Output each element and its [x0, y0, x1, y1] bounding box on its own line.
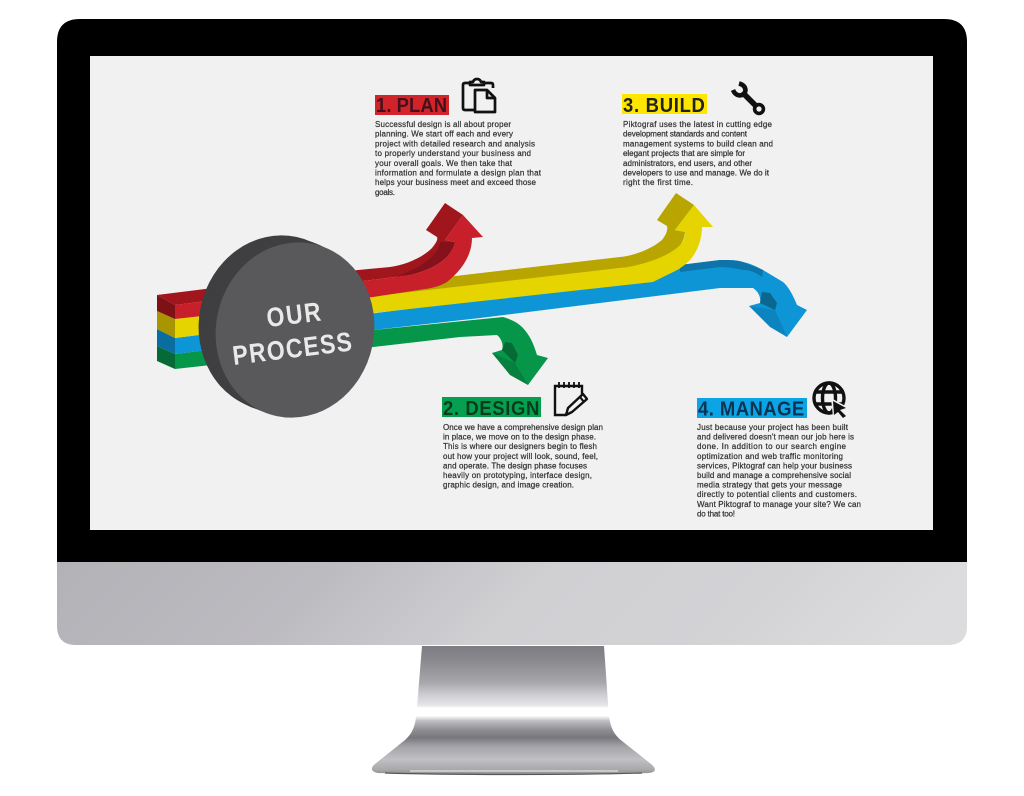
design text: and operate. The design phase focuses	[443, 461, 587, 470]
plan text: project with detailed research and analysis	[375, 139, 535, 148]
heading: build: 3. BUILD	[623, 94, 705, 117]
section 1: plan	[375, 79, 542, 197]
heading: plan: 1. PLAN	[376, 94, 447, 117]
manage text: done. In addition to our search engine	[697, 442, 847, 451]
green arrow	[157, 317, 548, 385]
design text	[443, 423, 603, 490]
plan text: to properly understand your business and	[375, 149, 531, 158]
disc: our process	[182, 220, 391, 433]
design text: This is where our designers begin to flesh	[443, 442, 597, 451]
design text: graphic design, and image creation.	[443, 481, 574, 490]
monitor stand	[372, 646, 655, 774]
design text: Once we have a comprehensive design plan	[443, 423, 603, 432]
design text: out how your project will look, sound, feel,	[443, 452, 598, 461]
blue arrow	[157, 260, 807, 354]
disc title	[227, 294, 354, 371]
red arrow	[157, 203, 483, 319]
disc side	[182, 220, 386, 431]
design text: in place, we move on to the design phase.	[443, 433, 596, 442]
screen	[90, 56, 933, 530]
manage text: do that too!	[697, 509, 735, 518]
plan text: planning. We start off each and every	[375, 130, 513, 139]
manage text: build and manage a comprehensive social	[697, 471, 851, 480]
manage text: optimization and web traffic monitoring	[697, 452, 843, 461]
disc title: PROCESS	[231, 327, 354, 371]
build text: developers to use and manage. We do it	[623, 168, 770, 178]
build text: Piktograf uses the latest in cutting edge	[623, 120, 773, 129]
manage text: services, Piktograf can help your business	[697, 461, 852, 470]
manage text: and delivered doesn't mean our job here is	[697, 433, 854, 442]
design text: heavily on prototyping, interface design,	[443, 471, 592, 480]
heading: manage: 4. MANAGE	[698, 398, 804, 421]
plan text: information and formulate a design plan that	[375, 168, 542, 178]
section 4: manage	[697, 383, 861, 518]
manage text: Just because your project has been built	[697, 423, 849, 432]
disc title: OUR	[265, 297, 322, 333]
section 3: build	[622, 84, 773, 187]
build text: development standards and content	[623, 130, 748, 139]
build text: elegant projects that are simple for	[623, 149, 745, 158]
icon: notepad and pencil	[555, 382, 587, 415]
plan text: goals.	[375, 188, 395, 197]
arrows diagram	[157, 193, 807, 433]
manage text: Want Piktograf to manage your site? We can	[697, 500, 861, 509]
section 2: design	[442, 382, 603, 490]
plan text: helps your business meet and exceed those	[375, 178, 537, 187]
manage text: directly to potential clients and customers.	[697, 490, 857, 499]
build text: management systems to build clean and	[623, 139, 773, 148]
heading: design: 2. DESIGN	[443, 397, 539, 420]
plan text	[375, 120, 542, 197]
icon: clipboard	[463, 79, 495, 112]
silver chin	[57, 562, 967, 645]
build text: right the first time.	[623, 178, 693, 187]
manage text	[697, 423, 861, 518]
black bezel	[57, 19, 967, 562]
yellow arrow	[157, 193, 713, 338]
icon: wrench	[733, 84, 763, 113]
plan text: Successful design is all about proper	[375, 120, 511, 129]
build text: administrators, end users, and other	[623, 159, 752, 168]
plan text: your overall goals. We then take that	[375, 159, 513, 168]
disc face	[199, 227, 391, 433]
manage text: media strategy that gets your message	[697, 481, 843, 490]
icon: globe with cursor	[814, 383, 849, 420]
build text	[623, 120, 773, 187]
